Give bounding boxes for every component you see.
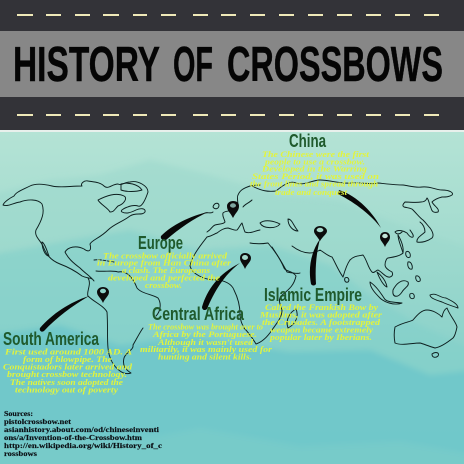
sumatra java: [370, 272, 402, 304]
panel: europe: [97, 233, 232, 290]
title: [13, 38, 443, 92]
baja: [42, 242, 49, 256]
text block: europe: crossbow.: [145, 281, 182, 290]
africa outline: [190, 237, 296, 344]
pin: china: [380, 232, 390, 247]
text block: islamic empire: Muslims, it was adopted after: [259, 310, 383, 320]
borneo: [393, 281, 408, 296]
black sea and caspian: [260, 219, 298, 231]
siberia coast: [252, 180, 453, 242]
panel: central africa: [140, 304, 273, 362]
text block: china: people to use a crossbow.: [264, 158, 365, 166]
sources: Sources:: [4, 409, 33, 418]
text block: central africa: The crossbow was brought over to: [148, 322, 263, 332]
text block: china: Developed in the Warring: [261, 164, 367, 174]
korea to china coast: [398, 235, 403, 253]
sources: ons/a/Invention-of-the-Crossbow.htm: [4, 433, 143, 442]
text block: central africa: militarily, it was mainly used for: [140, 345, 273, 354]
text block: south america: First used around 1000 AD. A: [4, 348, 133, 356]
text block: central africa: hunting and silent kills.: [158, 352, 252, 362]
heading: south america: South America: [3, 329, 100, 349]
arc: islamic empire: [310, 239, 320, 286]
text block: islamic empire: popular later by Iberians.: [269, 333, 372, 342]
text block: islamic empire: the Crusades. A footstrapped: [262, 318, 381, 327]
text block: china: trade and conquest: [275, 188, 348, 197]
text block: europe: developed and perfected the: [108, 274, 221, 282]
road dashes top: [17, 14, 439, 16]
text block: europe: [97, 252, 232, 290]
arc: china: [338, 190, 381, 228]
philippines and islands: [406, 251, 420, 282]
text block: south america: The natives soon adopted the: [10, 378, 124, 387]
sources: http://en.wikipedia.org/wiki/History_of_c: [4, 441, 163, 450]
hudson bay: [98, 194, 126, 212]
text block: islamic empire: weapon became extremely: [270, 326, 374, 334]
south america outline: [88, 271, 160, 374]
arctic island: [121, 183, 142, 192]
panel: south america: [3, 329, 133, 394]
text block: china: the front lines and spread through: [250, 180, 379, 188]
text block: china: The Chinese were the first: [262, 150, 370, 159]
sources: asianhistory.about.com/od/chineseinventi: [4, 425, 159, 434]
text block: islamic empire: [259, 303, 383, 342]
text block: europe: in Europe from Han China after: [97, 258, 232, 268]
arc: south america: [40, 296, 89, 332]
sources: pistolcrossbow.net: [4, 417, 72, 426]
text block: south america: [3, 348, 133, 394]
text block: china: States Period, it was used on: [252, 172, 380, 181]
caribbean: [94, 260, 114, 262]
madagascar: [287, 309, 297, 328]
sulawesi ring: [410, 293, 414, 299]
world map outlines: [3, 180, 458, 374]
arabia and south asia coast: [272, 235, 403, 277]
new guinea: [430, 294, 458, 308]
text block: south america: form of blowpipe. The: [23, 355, 113, 364]
panel: china: [250, 131, 380, 197]
panel: islamic empire: [259, 285, 383, 342]
heading: china: China: [289, 131, 327, 151]
sri lanka ring: [345, 277, 349, 282]
arc: europe: [161, 212, 208, 240]
road header background: [0, 0, 464, 132]
pin: europe: [227, 201, 239, 218]
road dashes bottom: [17, 114, 439, 116]
arc: central africa: [202, 263, 240, 310]
tasmania: [432, 353, 439, 357]
heading: central africa: Central Africa: [152, 304, 245, 324]
title band: [0, 31, 464, 97]
text block: central africa: Africa by the Portuguese.: [152, 330, 257, 339]
text block: south america: brought crossbow technology.: [7, 370, 127, 379]
pin: south america: [97, 287, 109, 303]
text block: china: [250, 150, 380, 197]
text block: europe: a clash. The Europeans: [122, 266, 210, 275]
text block: south america: Conquistadors later arrived and: [3, 362, 133, 372]
india east: [343, 260, 350, 277]
text block: south america: technology out of poverty: [15, 386, 119, 394]
uk: [213, 203, 219, 209]
north america outline: [3, 181, 148, 281]
pin: islamic empire: [314, 226, 327, 241]
pin: central africa: [240, 253, 251, 269]
text block: central africa: Although it wasn't used: [157, 338, 254, 347]
australia: [394, 308, 457, 348]
sources: rossbows: [4, 449, 37, 458]
text block: europe: The crossbow officially arrived: [103, 252, 228, 260]
sources: [4, 409, 163, 458]
title: OF: [173, 38, 213, 92]
title: HISTORY: [13, 38, 160, 92]
europe outline: [205, 185, 260, 237]
text block: central africa: [140, 322, 273, 362]
map background: [0, 132, 464, 464]
heading: islamic empire: Islamic Empire: [264, 285, 362, 305]
heading: europe: Europe: [138, 233, 183, 253]
text block: islamic empire: Called the Frankish Bow by: [265, 303, 379, 312]
